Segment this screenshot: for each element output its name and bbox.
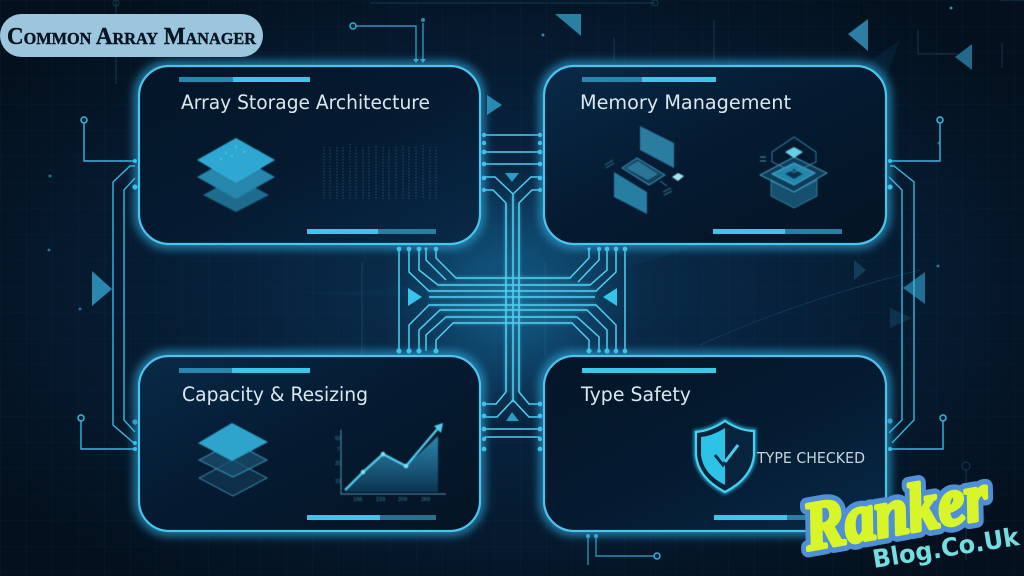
chart: growth line: 209 xyxy=(398,497,407,503)
icon: layered storage stack xyxy=(197,138,275,212)
logo: Ranker Blog.Co.Uk: Blog.Co.Uk xyxy=(870,522,1022,574)
chart: growth line: 289 xyxy=(421,497,430,503)
data columns xyxy=(324,144,436,199)
top and bottom connector traces xyxy=(350,18,660,565)
decorative triangles xyxy=(92,14,972,328)
chart: growth line: 239 xyxy=(376,497,385,503)
logo: Ranker Blog.Co.Uk: Ranker xyxy=(797,458,994,565)
central circuit xyxy=(399,173,625,437)
chart: growth line xyxy=(335,423,446,503)
panel: Type Safety xyxy=(544,356,886,531)
heading: Array Storage Architecture: Array Storage Architecture xyxy=(181,91,430,114)
chart: growth line: 7 xyxy=(337,447,340,453)
icon: shield with check xyxy=(696,421,754,492)
right side circuit traces xyxy=(887,117,946,451)
chart: growth line: 50 xyxy=(335,436,341,442)
icon: expanding layers xyxy=(198,423,268,496)
chart: growth line: 20 xyxy=(335,461,341,467)
icon: isometric memory device xyxy=(605,126,684,214)
panel: Capacity & Resizing xyxy=(139,356,480,531)
connectors between top panels xyxy=(396,133,627,451)
icon: layered chip xyxy=(760,137,827,208)
heading: Memory Management: Memory Management xyxy=(580,91,791,114)
heading: Type Safety: Type Safety xyxy=(580,383,691,406)
heading: Capacity & Resizing: Capacity & Resizing xyxy=(182,383,368,406)
label: type checked: TYPE CHECKED xyxy=(756,449,865,467)
panel: Array Storage Architecture xyxy=(139,66,480,244)
panel: Memory Management xyxy=(544,66,886,244)
chart: growth line: 198 xyxy=(353,497,362,503)
logo: Ranker Blog.Co.Uk: Ranker xyxy=(797,458,994,565)
title text: Common Array Manager xyxy=(7,24,257,50)
left side circuit traces xyxy=(78,117,138,451)
chart: growth line: 15 xyxy=(335,479,341,485)
title pill xyxy=(0,14,263,57)
